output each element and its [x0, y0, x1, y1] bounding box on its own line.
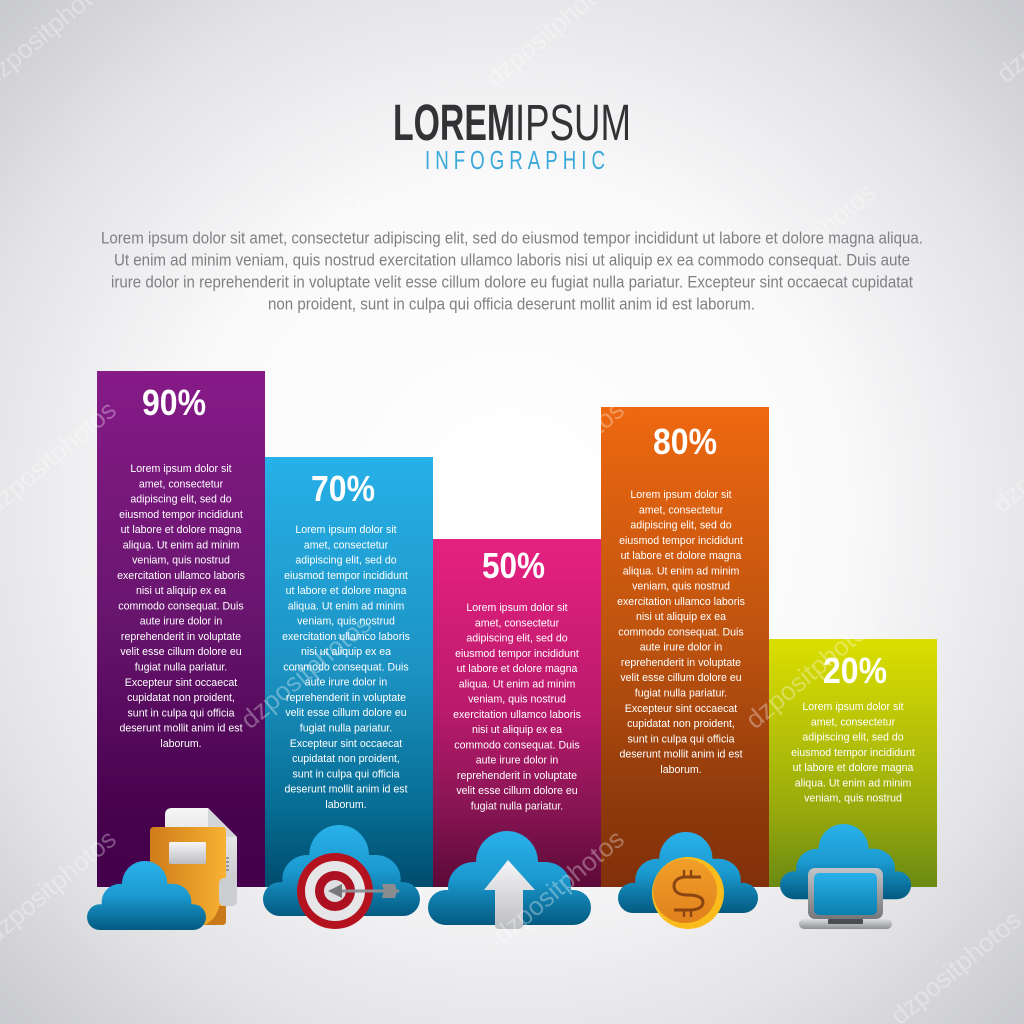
bar: 70% blue: Excepteur sint occaecat [290, 738, 402, 750]
bar: 80% orange: deserunt mollit anim id est [619, 749, 743, 761]
bar: 80% orange: eiusmod tempor incididunt [619, 535, 743, 547]
bar: 80% orange: adipiscing elit, sed do [630, 520, 732, 532]
bar: 90% purple: amet, consectetur [139, 478, 224, 490]
bar: 80% orange: veniam, quis nostrud [632, 581, 730, 593]
bar: 50% magenta: Lorem ipsum dolor sit [466, 602, 568, 614]
bar: 80% orange: fugiat nulla pariatur. [635, 688, 727, 700]
bar: 70% blue: fugiat nulla pariatur. [300, 723, 392, 735]
bar: 20% lime: veniam, quis nostrud [804, 793, 902, 805]
bar: 50% magenta: reprehenderit in voluptate [457, 770, 577, 782]
bar: 50% magenta: fugiat nulla pariatur. [471, 801, 563, 813]
watermark: dzpositphotos [740, 176, 882, 303]
bar: 80% orange: commodo consequat. Duis [618, 626, 744, 638]
icon: target and dart with cloud [263, 825, 420, 929]
bar: 80% orange: sunt in culpa qui officia [628, 733, 735, 745]
watermark over icons: dzpositphotos [488, 823, 630, 950]
bar: 70% blue: aute irure dolor in [305, 677, 387, 689]
bar: 90% purple: aliqua. Ut enim ad minim [123, 539, 239, 551]
bar: 50% magenta: veniam, quis nostrud [468, 694, 566, 706]
bar: 70% blue: adipiscing elit, sed do [295, 555, 397, 567]
watermark over bars: dzpositphotos [235, 608, 377, 735]
watermark: dzpositphotos [235, 176, 377, 303]
watermark over bars: dzpositphotos [740, 608, 882, 735]
bar: 50% magenta: exercitation ullamco laboris [453, 709, 581, 721]
title: IPSUM [515, 94, 631, 151]
bar: 90% purple: eiusmod tempor incididunt [119, 509, 243, 521]
intro paragraph: Lorem ipsum dolor sit amet, consectetur adipiscing elit, sed do eiusmod tempor incididunt ut labore et dolore magna aliqua. [101, 228, 923, 248]
icon: laptop with cloud [780, 824, 911, 929]
bar: 80% orange: exercitation ullamco laboris [617, 596, 745, 608]
bar: 70% blue: commodo consequat. Duis [283, 661, 409, 673]
bar: 20% lime: Lorem ipsum dolor sit [802, 701, 904, 713]
bar: 90% purple: 90% [142, 382, 206, 423]
bar: 90% purple: aute irure dolor in [140, 616, 222, 628]
bar: 90% purple: reprehenderit in voluptate [121, 631, 241, 643]
icon: dollar coin with cloud [618, 832, 758, 929]
bar: 70% blue: ut labore et dolore magna [286, 585, 406, 597]
bar: 70% blue: nisi ut aliquip ex ea [301, 646, 391, 658]
bar: 80% orange: amet, consectetur [639, 504, 724, 516]
bar: 90% purple: sunt in culpa qui officia [128, 707, 235, 719]
bar: 90% purple: deserunt mollit anim id est [119, 723, 243, 735]
watermark over icons [0, 823, 630, 950]
icon: upload arrow with cloud [428, 831, 591, 929]
bar: 90% purple: fugiat nulla pariatur. [135, 662, 227, 674]
bar: 90% purple: laborum. [160, 738, 202, 750]
bar: 70% blue: eiusmod tempor incididunt [284, 570, 408, 582]
bar: 80% orange [601, 407, 769, 887]
bar: 70% blue: sunt in culpa qui officia [292, 768, 400, 780]
bar: 20% lime: eiusmod tempor incididunt [791, 747, 915, 759]
bar: 70% blue: 70% [311, 468, 375, 509]
bar: 50% magenta: adipiscing elit, sed do [466, 633, 568, 645]
bar: 50% magenta: amet, consectetur [475, 617, 560, 629]
bar: 80% orange: velit esse cillum dolore eu [620, 672, 742, 684]
bar: 20% lime: 20% [823, 650, 887, 691]
watermark over bars [0, 394, 882, 735]
bar: 90% purple [97, 371, 265, 887]
bar: 70% blue: cupidatat non proident, [292, 753, 400, 765]
bar: 80% orange: laborum. [660, 764, 702, 776]
bar: 70% blue [265, 457, 433, 887]
bar: 90% purple: ut labore et dolore magna [121, 524, 241, 536]
bar: 70% blue: exercitation ullamco laboris [282, 631, 410, 643]
bar: 90% purple: Lorem ipsum dolor sit [130, 463, 232, 475]
bar: 50% magenta: nisi ut aliquip ex ea [472, 724, 562, 736]
bar: 50% magenta: velit esse cillum dolore eu [456, 785, 578, 797]
bar: 50% magenta: aliqua. Ut enim ad minim [459, 678, 575, 690]
bar: 70% blue: laborum. [325, 799, 367, 811]
bar: 70% blue: reprehenderit in voluptate [286, 692, 406, 704]
bar: 50% magenta [433, 539, 601, 887]
bar: 90% purple: Excepteur sint occaecat [125, 677, 237, 689]
bar: 90% purple: exercitation ullamco laboris [117, 570, 245, 582]
bar: 80% orange: 80% [653, 421, 717, 462]
bar: 70% blue: amet, consectetur [304, 539, 389, 551]
bar: 70% blue: aliqua. Ut enim ad minim [288, 600, 404, 612]
bar: 20% lime [769, 639, 937, 887]
icon: folder and document with cloud [87, 808, 237, 930]
bar: 80% orange: Lorem ipsum dolor sit [630, 489, 732, 501]
bar: 90% purple: velit esse cillum dolore eu [120, 646, 242, 658]
intro paragraph: irure dolor in reprehenderit in voluptate velit esse cillum dolore eu fugiat nulla pariatur. Excepteur sint occaecat cupidatat [111, 272, 913, 292]
bar: 80% orange: aute irure dolor in [640, 642, 722, 654]
bar: 90% purple: adipiscing elit, sed do [130, 494, 232, 506]
bar: 20% lime: aliqua. Ut enim ad minim [795, 777, 911, 789]
intro paragraph: non proident, sunt in culpa qui officia deserunt mollit anim id est laborum. [268, 294, 755, 314]
bar: 50% magenta: aute irure dolor in [476, 755, 558, 767]
bar: 80% orange: nisi ut aliquip ex ea [636, 611, 726, 623]
bar: 90% purple: nisi ut aliquip ex ea [136, 585, 226, 597]
bar: 80% orange: aliqua. Ut enim ad minim [623, 565, 739, 577]
bar: 20% lime: amet, consectetur [811, 716, 896, 728]
intro paragraph: Ut enim ad minim veniam, quis nostrud exercitation ullamco laboris nisi ut aliquip ex ea commodo consequat. Duis aute [114, 250, 910, 270]
bar: 70% blue: Lorem ipsum dolor sit [295, 524, 397, 536]
bar: 50% magenta: 50% [482, 545, 545, 586]
bar: 70% blue: veniam, quis nostrud [297, 616, 395, 628]
bar: 80% orange: reprehenderit in voluptate [621, 657, 741, 669]
watermark over bars: dzpositphotos [488, 394, 630, 521]
bar: 90% purple: commodo consequat. Duis [118, 600, 244, 612]
bar: 70% blue: velit esse cillum dolore eu [285, 707, 407, 719]
bar: 50% magenta: commodo consequat. Duis [454, 739, 580, 751]
bar: 50% magenta: ut labore et dolore magna [457, 663, 577, 675]
bar: 80% orange: cupidatat non proident, [627, 718, 735, 730]
bar: 80% orange: ut labore et dolore magna [621, 550, 741, 562]
bar: 80% orange: Excepteur sint occaecat [625, 703, 737, 715]
bar: 50% magenta: eiusmod tempor incididunt [455, 648, 579, 660]
bar: 20% lime: adipiscing elit, sed do [802, 732, 904, 744]
bar: 90% purple: cupidatat non proident, [127, 692, 235, 704]
bar: 70% blue: deserunt mollit anim id est [284, 784, 408, 796]
subtitle: INFOGRAPHIC [425, 145, 605, 175]
intro paragraph [101, 228, 923, 314]
bar: 20% lime: ut labore et dolore magna [793, 762, 913, 774]
bar: 90% purple: veniam, quis nostrud [132, 555, 230, 567]
title: LOREM [393, 94, 515, 151]
